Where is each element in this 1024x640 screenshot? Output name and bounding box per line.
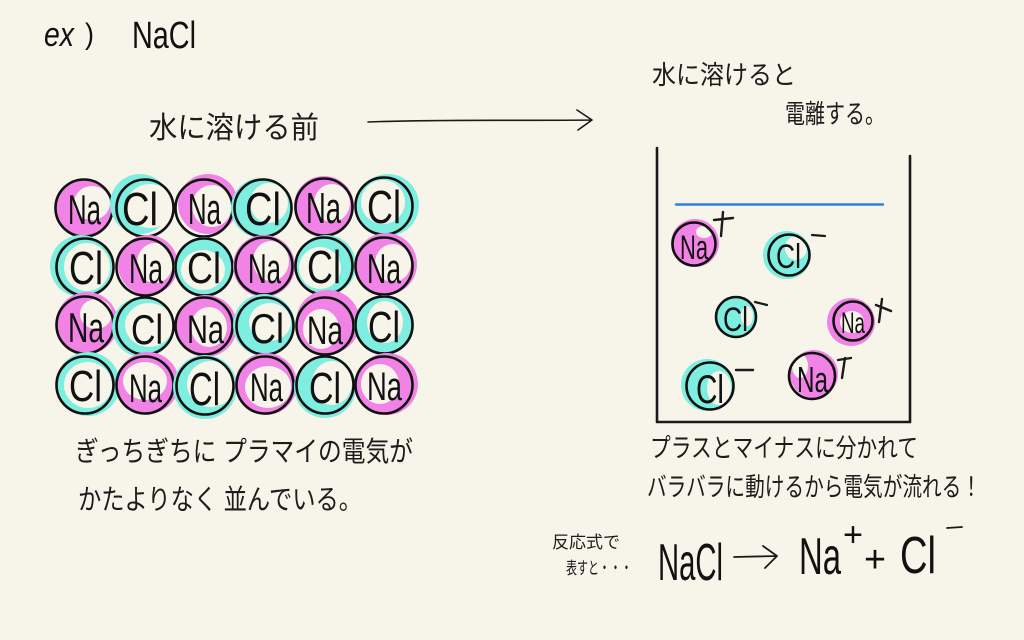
ion: Na+ bottom right	[789, 350, 851, 400]
heading: before dissolving: 水に溶ける前	[149, 112, 319, 145]
arrow: reaction	[734, 546, 777, 568]
ion: Na r3c1	[56, 292, 118, 354]
ion: Na r1c1: Na	[68, 186, 101, 233]
ion: Cl r4c1	[56, 352, 120, 416]
ion: Na r3c1: Na	[68, 304, 104, 351]
ion: Cl r2c3	[174, 237, 234, 297]
ion: Na r2c4	[233, 235, 295, 297]
ion: Cl r3c6	[354, 295, 414, 355]
ion: Na r3c3	[175, 295, 237, 357]
text block: ions explanation: プラスとマイナスに分かれて	[650, 433, 918, 463]
ion: Cl r2c5: Cl	[307, 241, 341, 293]
ion: Cl r3c6: Cl	[368, 303, 400, 352]
ion: Cl r1c4: Cl	[245, 183, 281, 235]
text block: lattice explanation	[75, 436, 413, 515]
text block: lattice explanation: かたよりなく 並んでいる。	[78, 484, 362, 515]
ion: Na r4c6: Na	[367, 365, 403, 409]
ion: Cl r3c4: Cl	[250, 305, 284, 352]
chemical equation: +	[843, 516, 863, 554]
ion: Cl r1c4	[231, 178, 292, 238]
ion: Na r1c3: Na	[188, 185, 221, 234]
ion: Na+ right	[827, 298, 891, 346]
ion: Na+ right: Na	[841, 307, 865, 340]
ion: Cl r4c3: Cl	[189, 363, 220, 415]
ion: Na+ top left	[671, 212, 733, 267]
ion: Cl r3c4	[233, 294, 295, 356]
ion: Cl r4c3	[173, 355, 237, 419]
chemical equation: Cl	[900, 527, 936, 585]
ion: Na r2c6: Na	[367, 245, 401, 292]
ion: Na r2c4: Na	[248, 245, 281, 292]
ion: Cl- top middle: Cl	[776, 238, 801, 276]
ion: Cl- top middle	[763, 231, 825, 279]
heading: after dissolving: 電離する。	[785, 99, 885, 129]
ion: Na r1c3	[176, 174, 238, 236]
text block: reaction equation label: 表すと・・・	[566, 559, 632, 578]
ion: Cl r4c5	[294, 356, 356, 418]
chemical equation: +	[864, 539, 886, 581]
ion: Cl- centre: Cl	[723, 301, 748, 339]
ion: Na r3c5: Na	[307, 309, 344, 353]
text block: lattice explanation: ぎっちぎちに プラマイの電気が	[75, 436, 413, 467]
text block: reaction equation label: 反応式で	[552, 533, 620, 552]
chemical equation: Na	[799, 528, 841, 586]
ion: Na+ bottom right: Na	[797, 359, 829, 400]
ion: Na r2c2	[116, 235, 178, 296]
ion: Cl r1c2	[110, 174, 174, 236]
text block: ions explanation	[647, 433, 981, 502]
ion: Cl r1c2: Cl	[122, 183, 158, 235]
ion: Na r3c5	[296, 290, 360, 354]
ion: Na r4c2	[116, 352, 179, 414]
heading: after dissolving	[652, 60, 885, 129]
ion: Na r1c1	[55, 179, 113, 237]
ion: Na r1c5	[294, 176, 354, 236]
title: ex) NaCl: ex	[44, 16, 75, 54]
ion: Cl- centre	[716, 297, 767, 339]
ion: Cl- bottom left: Cl	[696, 368, 724, 412]
title: ex) NaCl: )	[85, 18, 94, 51]
text block: reaction equation label	[552, 533, 632, 578]
heading: after dissolving: 水に溶けると	[652, 60, 796, 90]
ion: Cl r4c1: Cl	[69, 362, 102, 411]
ion: Cl r2c3: Cl	[187, 244, 221, 293]
water surface	[676, 203, 883, 206]
ion: Na+ top left: Na	[680, 229, 708, 267]
ion: Cl r3c2: Cl	[131, 306, 163, 353]
ion: Na r4c6	[356, 353, 418, 415]
ion: Cl- bottom left	[681, 359, 753, 412]
ion: Cl r2c5	[296, 235, 356, 295]
ion: Na r1c5: Na	[306, 184, 341, 233]
panel: NaCl crystal lattice	[50, 174, 419, 419]
title: ex) NaCl	[44, 15, 196, 57]
ion: Na r2c2: Na	[129, 245, 163, 292]
ion: Cl r1c6: Cl	[367, 181, 401, 233]
ion: Cl r2c1: Cl	[69, 242, 103, 294]
chemical equation	[658, 516, 962, 592]
ion: Cl r3c2	[112, 297, 174, 357]
chemical equation: NaCl	[658, 534, 723, 592]
ion: Cl r2c1	[50, 235, 114, 297]
ion: Na r4c4: Na	[250, 366, 283, 410]
ion: Na r4c4	[235, 353, 297, 415]
beaker outline	[657, 148, 910, 422]
title: ex) NaCl: NaCl	[132, 15, 196, 57]
ion: Na r4c2: Na	[129, 367, 162, 411]
ion: Na r2c6	[355, 233, 417, 295]
panel: beaker with dissociated ions	[657, 148, 910, 422]
ion: Cl r4c5: Cl	[309, 364, 341, 413]
arrow: before to after	[368, 110, 592, 130]
ion: Cl r1c6	[356, 174, 419, 236]
ion: Na r3c3: Na	[187, 308, 225, 352]
